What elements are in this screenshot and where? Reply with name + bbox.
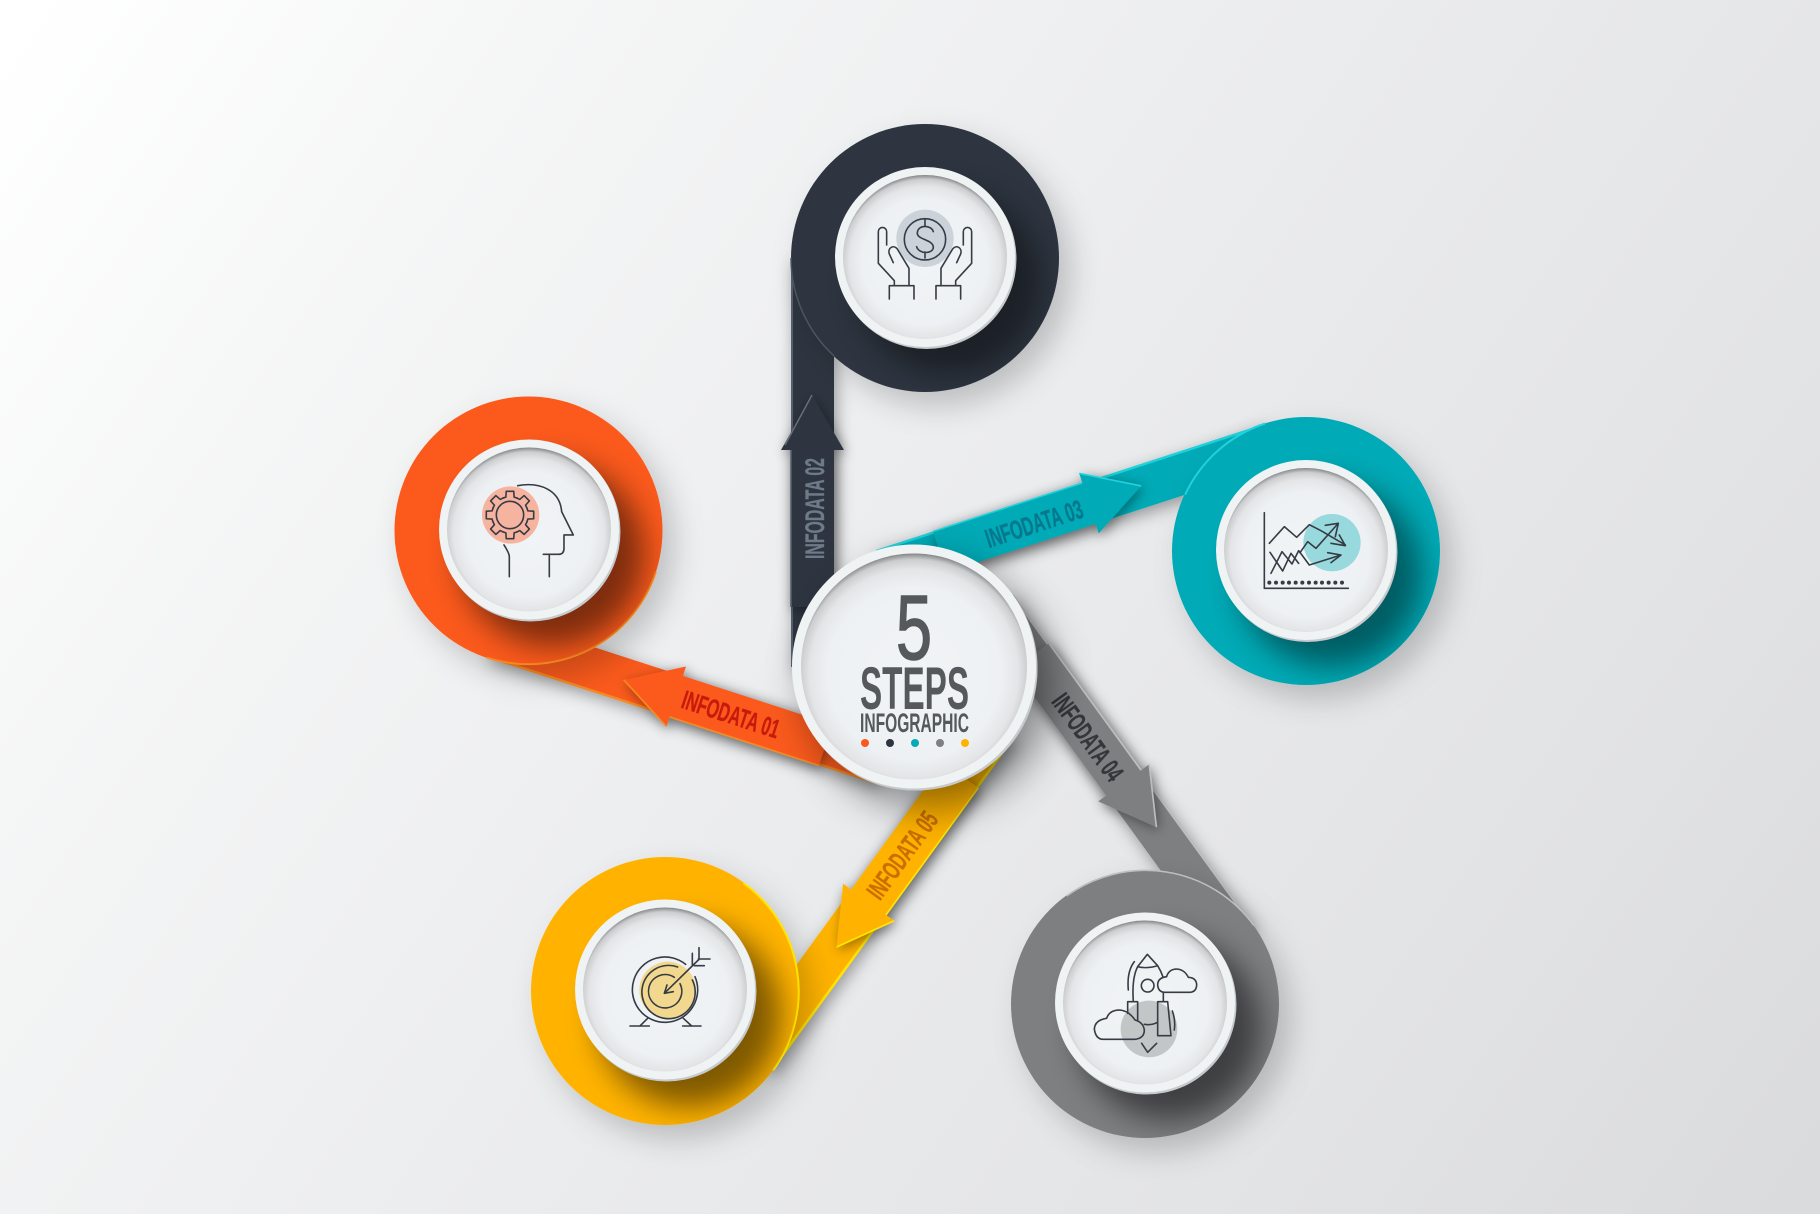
disc 03 [1172, 417, 1440, 685]
ring shadow 02 [857, 190, 1041, 374]
ring shadow 04 [1077, 936, 1261, 1120]
title: STEPS: STEPS [860, 655, 969, 722]
subtitle: INFOGRAPHIC: INFOGRAPHIC [860, 708, 969, 738]
step 01: orange arm [394, 396, 889, 784]
ribbon 01 [487, 617, 889, 784]
badge 01 [439, 440, 620, 622]
disc edge highlight 02 [791, 258, 834, 356]
ring shadow 05 [597, 923, 781, 1107]
step 05: yellow arm [531, 714, 1014, 1125]
badge 02 [835, 167, 1016, 349]
arrowhead 04 [1006, 637, 1181, 846]
disc 04 [1011, 870, 1279, 1138]
disc edge highlight 04 [1067, 817, 1254, 1004]
icon: hands with coin [878, 210, 972, 299]
title: 5: 5 [896, 577, 932, 679]
badge 03 [1216, 460, 1398, 642]
label: INFODATA 02: INFODATA 02 [800, 458, 830, 559]
disc 01 [394, 396, 662, 664]
arrowhead 02 [781, 395, 844, 607]
ribbon 02 [791, 258, 834, 667]
icon: rocket and clouds [1094, 954, 1197, 1057]
icon: chart with arrows [1264, 513, 1361, 588]
center inner face [801, 554, 1027, 780]
legend dots [861, 739, 969, 747]
ring shadow 01 [460, 462, 644, 646]
label: INFODATA 03: INFODATA 03 [981, 494, 1087, 554]
ribbon 05 [738, 714, 1014, 1070]
arrowhead 03 [930, 456, 1151, 582]
arrowhead 05 [811, 757, 986, 965]
badge 05 [575, 900, 756, 1082]
badge 04 [1055, 912, 1236, 1094]
icon: head with gear [482, 485, 573, 577]
ring shadow 03 [1238, 483, 1422, 667]
disc edge highlight 03 [1172, 424, 1278, 495]
label: INFODATA 05: INFODATA 05 [861, 806, 944, 905]
step 02: dark arm [781, 124, 1059, 667]
step 04: gray arm [979, 595, 1279, 1138]
label: INFODATA 01: INFODATA 01 [678, 685, 784, 744]
center badge [792, 544, 1038, 790]
label: INFODATA 04: INFODATA 04 [1046, 688, 1130, 787]
ribbon 04 [979, 595, 1254, 951]
center disc [792, 544, 1038, 790]
disc 02 [791, 124, 1059, 392]
disc 05 [531, 857, 799, 1125]
disc edge highlight 01 [487, 530, 656, 699]
step 03: teal arm [876, 417, 1440, 685]
icon: target with arrow [630, 948, 710, 1026]
disc edge highlight 05 [665, 883, 852, 1070]
arrowhead 01 [614, 650, 835, 775]
ribbon 03 [876, 424, 1278, 591]
